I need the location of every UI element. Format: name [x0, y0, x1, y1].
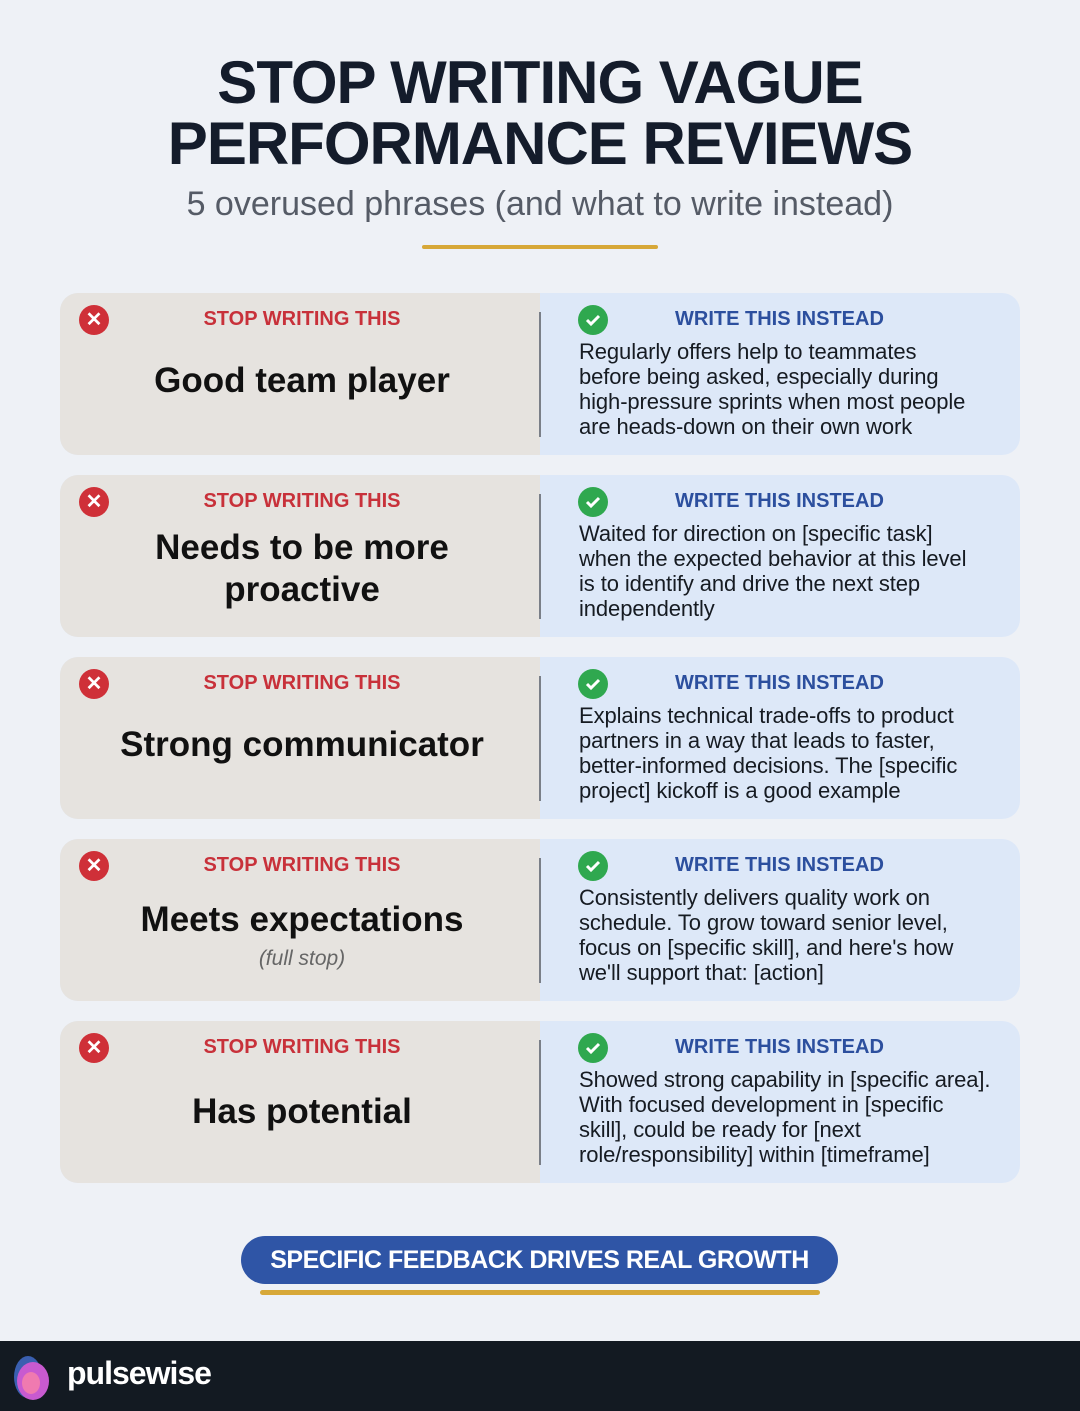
card 5 — [60, 1021, 1020, 1183]
phrase: Strong communicator — [120, 725, 484, 764]
icon: x: ✕ — [86, 309, 102, 331]
body: With focused development in [specific — [579, 1092, 943, 1117]
card 2: WRITE THIS INSTEAD — [675, 490, 884, 512]
phrase: Has potential — [192, 1092, 412, 1131]
body: Regularly offers help to teammates — [579, 339, 916, 364]
note: (full stop) — [259, 947, 345, 970]
card 4: STOP WRITING THIS — [203, 854, 401, 876]
body: schedule. To grow toward senior level, — [579, 910, 948, 935]
phrase: Good team player — [154, 361, 450, 400]
body: Consistently delivers quality work on — [579, 885, 930, 910]
icon: x — [79, 1033, 109, 1063]
body: skill], could be ready for [next — [579, 1117, 861, 1142]
body — [579, 1067, 990, 1167]
phrase: proactive — [224, 570, 380, 609]
title — [168, 49, 912, 177]
card 1: STOP WRITING THIS — [203, 308, 401, 330]
body: high-pressure sprints when most people — [579, 389, 965, 414]
body: before being asked, especially during — [579, 364, 939, 389]
body: Waited for direction on [specific task] — [579, 521, 933, 546]
icon: x: ✕ — [86, 855, 102, 877]
icon: check — [578, 487, 608, 517]
footer — [0, 1341, 1080, 1411]
body: independently — [579, 596, 715, 621]
icon: x: ✕ — [86, 673, 102, 695]
card 5: WRITE THIS INSTEAD — [675, 1036, 884, 1058]
icon: x — [79, 487, 109, 517]
icon: x — [79, 851, 109, 881]
phrase: Needs to be more — [155, 528, 449, 567]
body: Showed strong capability in [specific area]. — [579, 1067, 990, 1092]
card 3: WRITE THIS INSTEAD — [675, 672, 884, 694]
icon: check — [578, 305, 608, 335]
phrase — [155, 528, 449, 609]
card 2 — [60, 475, 1020, 637]
body — [579, 339, 965, 439]
footer: pulsewise — [67, 1355, 211, 1391]
banner — [241, 1236, 838, 1284]
body: partners in a way that leads to faster, — [579, 728, 935, 753]
body: role/responsibility] within [timeframe] — [579, 1142, 930, 1167]
body: better-informed decisions. The [specific — [579, 753, 957, 778]
icon: check — [578, 669, 608, 699]
icon: check — [578, 851, 608, 881]
card 3 — [60, 657, 1020, 819]
card 2: STOP WRITING THIS — [203, 490, 401, 512]
icon: x: ✕ — [86, 491, 102, 513]
icon: x: ✕ — [86, 1037, 102, 1059]
banner: SPECIFIC FEEDBACK DRIVES REAL GROWTH — [270, 1246, 809, 1274]
body: project] kickoff is a good example — [579, 778, 900, 803]
body — [579, 521, 966, 621]
logo — [14, 1356, 49, 1400]
card 4: WRITE THIS INSTEAD — [675, 854, 884, 876]
body: is to identify and drive the next step — [579, 571, 920, 596]
phrase: Meets expectations — [141, 900, 463, 939]
body — [579, 703, 957, 803]
body: Explains technical trade-offs to product — [579, 703, 954, 728]
card 1 — [60, 293, 1020, 455]
body: we'll support that: [action] — [579, 960, 824, 985]
card 1: WRITE THIS INSTEAD — [675, 308, 884, 330]
body: are heads-down on their own work — [579, 414, 912, 439]
icon: x — [79, 305, 109, 335]
body: when the expected behavior at this level — [579, 546, 966, 571]
title: STOP WRITING VAGUE — [217, 49, 863, 116]
card 3: STOP WRITING THIS — [203, 672, 401, 694]
card 5: STOP WRITING THIS — [203, 1036, 401, 1058]
card 4 — [60, 839, 1020, 1001]
subtitle: 5 overused phrases (and what to write instead) — [187, 185, 893, 223]
body — [579, 885, 954, 985]
icon: check — [578, 1033, 608, 1063]
body: focus on [specific skill], and here's how — [579, 935, 953, 960]
icon: x — [79, 669, 109, 699]
title: PERFORMANCE REVIEWS — [168, 110, 912, 177]
